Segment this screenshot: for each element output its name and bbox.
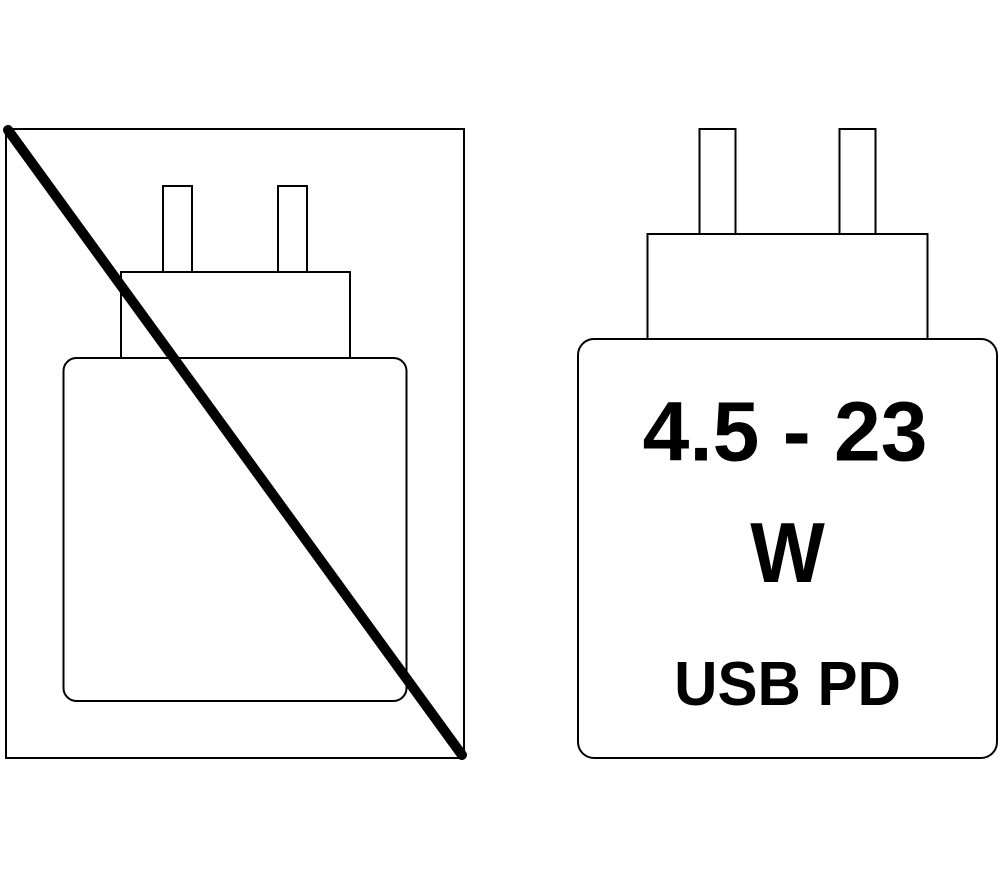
strike-through line bbox=[8, 130, 462, 755]
USB PD label: USB PD bbox=[674, 649, 901, 718]
panel: no charger included bbox=[6, 129, 464, 758]
icon: small charger bbox=[64, 186, 406, 701]
crossed-out frame bbox=[6, 129, 464, 758]
wattage unit: W bbox=[750, 506, 825, 601]
wattage range: 4.5 - 23 bbox=[643, 384, 927, 479]
panel: compatible charger bbox=[578, 129, 997, 758]
icon: charger bbox=[578, 129, 997, 758]
